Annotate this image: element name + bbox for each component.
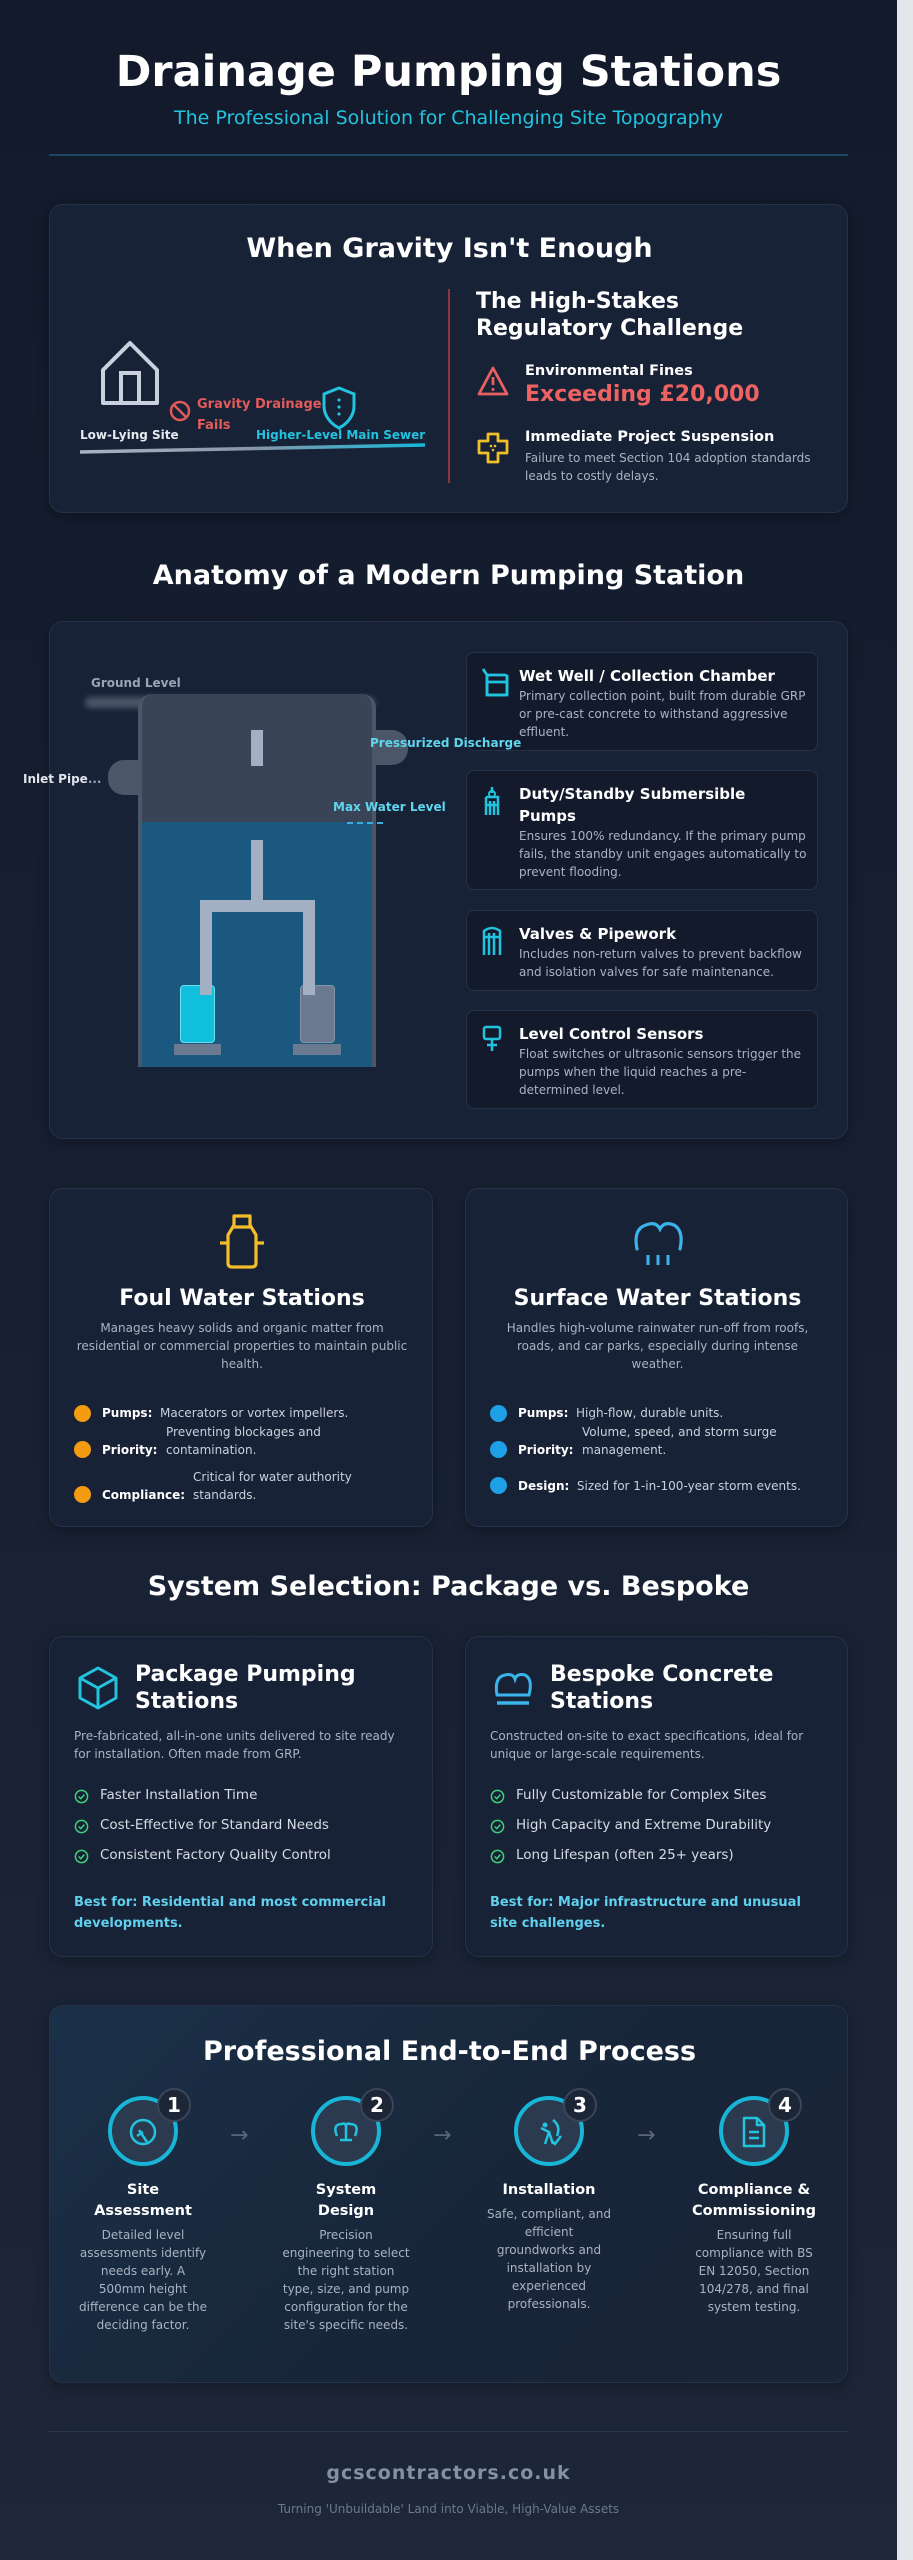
title	[550, 1662, 773, 1714]
regulatory challenge: Exceeding £20,000	[525, 382, 760, 407]
card: sensors: Level Control Sensors	[519, 1025, 704, 1043]
diagram: pumping station cross-section	[23, 676, 521, 1067]
regulatory challenge	[476, 289, 810, 483]
heading	[476, 289, 743, 341]
discharge pipe	[376, 730, 408, 765]
step 2	[282, 2088, 410, 2332]
icon: house	[101, 340, 159, 405]
checklist: High Capacity and Extreme Durability	[516, 1817, 771, 1833]
label: pressurized discharge: Pressurized Discharge	[370, 736, 521, 750]
step 1	[79, 2088, 207, 2332]
slope line	[80, 443, 426, 454]
step 3: 3	[573, 2093, 587, 2117]
label: gravity drainage fails: Gravity Drainage	[197, 397, 322, 412]
checklist: Cost-Effective for Standard Needs	[100, 1817, 329, 1833]
card: pumps	[466, 770, 818, 890]
checklist: Consistent Factory Quality Control	[100, 1847, 331, 1863]
title: Stations	[135, 1689, 238, 1714]
card: pumps: Pumps	[519, 807, 576, 825]
icon: concrete	[494, 1673, 532, 1705]
step 2: Precision engineering to select the right station type, size, and pump configuration for the site's specific needs.	[282, 2228, 410, 2332]
arrow: →	[433, 2123, 451, 2148]
bullets: Design: Sized for 1-in-100-year storm events.	[518, 1479, 801, 1493]
bullets: Pumps: Macerators or vortex impellers.	[102, 1406, 348, 1420]
checklist: Faster Installation Time	[100, 1787, 257, 1803]
text: fines: Environmental Fines	[525, 363, 693, 379]
text: Turning 'Unbuildable' Land into Viable, High-Value Assets	[278, 2502, 619, 2516]
label: low-lying site: Low-Lying Site	[80, 428, 179, 442]
pump: standby	[300, 985, 335, 1043]
heading: Regulatory Challenge	[476, 316, 743, 341]
chamber	[138, 694, 376, 1067]
step 4: 4	[778, 2093, 792, 2117]
bullets: Preventing blockages and contamination.	[166, 1425, 321, 1457]
card: valves	[466, 910, 818, 991]
description: Handles high-volume rainwater run-off from roofs, roads, and car parks, especially during intense weather.	[507, 1321, 808, 1371]
heading: When Gravity Isn't Enough	[246, 233, 653, 264]
arrow: →	[637, 2123, 655, 2148]
bullets: Volume, speed, and storm surge management.	[582, 1425, 777, 1457]
panel: package	[49, 1636, 433, 1957]
step 2: 2	[370, 2093, 384, 2117]
step 1: Detailed level assessments identify needs early. A 500mm height difference can be the deciding factor.	[79, 2228, 207, 2332]
step 3	[487, 2088, 611, 2311]
pipework	[251, 730, 263, 766]
heading: Professional End-to-End Process	[203, 2036, 696, 2067]
card: pumps: Duty/Standby Submersible	[519, 785, 745, 803]
step 1: Assessment	[94, 2203, 192, 2219]
label: ground level: Ground Level	[91, 676, 181, 690]
card: sensors	[466, 1010, 818, 1109]
panel: bespoke	[465, 1636, 848, 1957]
card: sensors: Float switches or ultrasonic sensors trigger the pumps when the liquid reaches a pre-determined level.	[519, 1047, 801, 1097]
icon: shield	[322, 386, 356, 430]
label: gravity drainage fails: Fails	[197, 418, 231, 433]
regulatory challenge: Failure to meet Section 104 adoption standards leads to costly delays.	[525, 451, 810, 483]
label: inlet pipe: Inlet Pipe...	[23, 772, 102, 786]
panel: surface water	[465, 1188, 848, 1527]
icon: sensor	[482, 1026, 502, 1051]
icon: rain cloud	[634, 1222, 683, 1265]
step 1: 1	[167, 2093, 181, 2117]
heading: system selection: System Selection: Package vs. Bespoke	[148, 1571, 749, 1602]
step 3: Installation	[502, 2182, 595, 2198]
title: Stations	[550, 1689, 653, 1714]
card: wet well	[466, 652, 818, 751]
heading: The High-Stakes	[476, 289, 679, 314]
checklist: Long Lifespan (often 25+ years)	[516, 1847, 734, 1863]
heading: anatomy: Anatomy of a Modern Pumping Station	[153, 560, 744, 591]
arrow: →	[230, 2123, 248, 2148]
bullets	[74, 1405, 352, 1503]
icon: cube	[78, 1666, 118, 1710]
title: Bespoke Concrete	[550, 1662, 773, 1687]
panel: foul water	[49, 1188, 433, 1527]
card: valves: Valves & Pipework	[519, 925, 676, 943]
icon: warning	[478, 366, 508, 396]
title: Surface Water Stations	[514, 1286, 801, 1311]
step 2: Design	[318, 2203, 374, 2219]
footer: gcscontractors.co.uk	[326, 2462, 571, 2484]
panel: process	[49, 2005, 848, 2383]
card: wet well: Wet Well / Collection Chamber	[519, 667, 775, 685]
description: Manages heavy solids and organic matter from residential or commercial properties to maintain public health.	[77, 1321, 407, 1371]
icon: pump	[484, 787, 500, 815]
gravity diagram	[80, 340, 426, 454]
step 4: Ensuring full compliance with BS EN 12050, Section 104/278, and final system testing.	[695, 2228, 813, 2314]
bullets: Priority:	[518, 1443, 573, 1457]
icon: foul	[220, 1214, 264, 1269]
card: pumps: Ensures 100% redundancy. If the primary pump fails, the standby unit engages automatically to prevent flooding.	[519, 829, 806, 879]
label: max water level: Max Water Level	[333, 800, 446, 814]
bullets	[490, 1405, 801, 1494]
step 3: Safe, compliant, and efficient groundworks and installation by experienced professionals.	[487, 2207, 611, 2311]
description: Constructed on-site to exact specifications, ideal for unique or large-scale requirements.	[490, 1729, 803, 1761]
step 4: Commissioning	[692, 2203, 816, 2219]
card: wet well: Primary collection point, built from durable GRP or pre-cast concrete to withstand aggressive effluent.	[519, 689, 806, 739]
step 1: Site	[127, 2182, 159, 2198]
bullets: Compliance:	[102, 1488, 185, 1502]
step 4: Compliance &	[698, 2182, 810, 2198]
title	[135, 1662, 356, 1714]
inlet pipe	[108, 760, 140, 795]
description: Pre-fabricated, all-in-one units delivered to site ready for installation. Often made from GRP.	[74, 1729, 395, 1761]
best for: Best for: Residential and most commercial developments.	[74, 1895, 386, 1931]
checklist	[74, 1787, 331, 1864]
bullets: Critical for water authority standards.	[193, 1470, 352, 1502]
label: higher-level main sewer: Higher-Level Main Sewer	[256, 428, 425, 442]
subtitle: The Professional Solution for Challenging Site Topography	[174, 107, 723, 129]
pump: duty	[180, 985, 215, 1043]
step 4	[692, 2088, 816, 2314]
icon: no	[170, 400, 190, 422]
icon: bucket	[482, 668, 508, 696]
bullets: Priority:	[102, 1443, 157, 1457]
icon: puzzle	[478, 432, 508, 464]
checklist	[490, 1787, 771, 1864]
checklist: Fully Customizable for Complex Sites	[516, 1787, 766, 1803]
title: Foul Water Stations	[119, 1286, 365, 1311]
panel: anatomy	[49, 621, 848, 1139]
best for: Best for: Major infrastructure and unusual site challenges.	[490, 1895, 801, 1931]
icon: valves	[482, 926, 502, 955]
card: valves: Includes non-return valves to prevent backflow and isolation valves for safe maintenance.	[519, 947, 802, 979]
label: gravity drainage fails	[197, 397, 322, 433]
title: Drainage Pumping Stations	[116, 47, 781, 97]
title: Package Pumping	[135, 1662, 356, 1687]
bullets: Pumps: High-flow, durable units.	[518, 1406, 723, 1420]
step 2: System	[316, 2182, 376, 2198]
panel: when gravity isn't enough	[49, 204, 848, 513]
text: suspension: Immediate Project Suspension	[525, 429, 774, 445]
